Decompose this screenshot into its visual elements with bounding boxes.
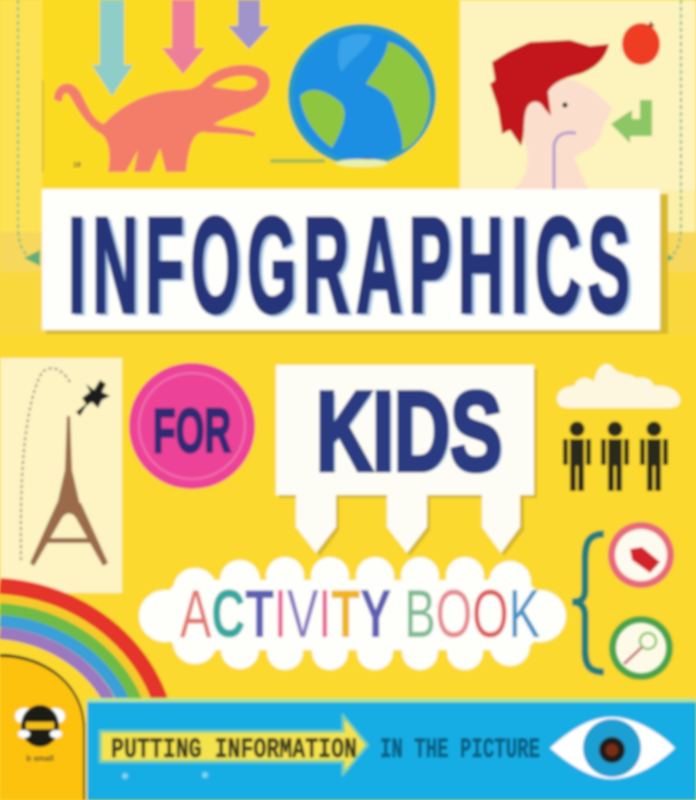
icon: eye [550,717,675,779]
sparkles [122,772,208,779]
decorative scale line [42,80,44,172]
panel: falling arrows [92,0,270,96]
icon: apple [622,21,660,65]
panel: kids: KIDS [319,371,505,496]
icon: three people [563,422,668,491]
dashed jump arc [21,368,70,560]
icon: globe [288,24,436,167]
title text: INFOGRAPHICS [71,191,633,343]
badge: for: FOR [153,397,231,466]
arrow banner [99,713,369,777]
dashed guide lines [18,0,681,258]
icon: eiffel tower [30,416,108,566]
icon: magnifier circle [609,616,673,680]
icon: boy profile [490,40,612,190]
icon: cloud top right [557,364,680,408]
panel: kids: KIDS [316,369,502,494]
arrow banner: PUTTING INFORMATION [111,735,357,766]
icon: frog [76,380,110,416]
title panel [42,189,668,343]
panel: kids [276,365,537,556]
logo corner [0,654,85,800]
cloud: activity book: ACTIVITY BOOK [180,576,540,652]
cloud: activity book [139,557,566,670]
ground line [270,159,325,163]
icon: bee logo [15,705,65,747]
icon: rainbow [0,586,160,700]
tagline: IN THE PICTURE [380,735,540,766]
bottom band [87,698,696,800]
scale label: 18 [73,162,81,169]
arrowhead right [660,250,674,266]
brace [572,534,604,672]
icon: price tag circle [608,522,674,588]
publisher name: b small [26,754,54,763]
arrowhead left [24,250,40,266]
badge: for [129,363,255,489]
panel: eiffel tower [0,358,122,593]
icon: elephant [54,65,270,172]
icon: green arrow [611,100,652,143]
title text: INFOGRAPHICS [68,189,630,341]
